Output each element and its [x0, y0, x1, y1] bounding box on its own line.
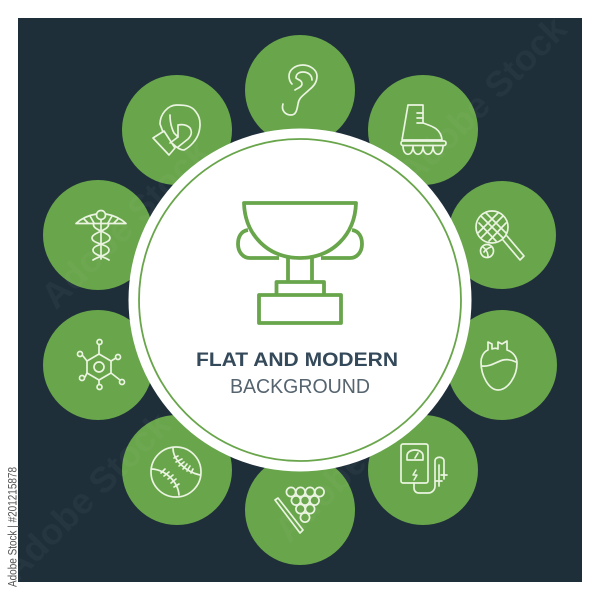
watermark: Adobe Stock [390, 7, 575, 193]
watermark: Adobe Stock [266, 364, 451, 550]
icon: electric multimeter [401, 444, 447, 493]
central green ring [139, 139, 461, 461]
icon: inline skate [401, 105, 446, 154]
icon: tennis racket and ball [476, 211, 524, 260]
icon: anatomical heart [481, 341, 517, 390]
watermark: Adobe Stock [33, 131, 218, 316]
central white circle [128, 128, 472, 472]
icon: molecule [78, 340, 124, 390]
icon: ear [282, 65, 317, 115]
green circles [43, 35, 557, 565]
white line icons [76, 65, 524, 533]
icon: trophy [238, 203, 362, 323]
icon: baseball [151, 447, 201, 497]
icon: caduceus [76, 210, 126, 260]
stock image id label: Adobe Stock | #201215878 [8, 467, 20, 587]
icon: billiard balls and cue [275, 487, 324, 533]
subheading: BACKGROUND [230, 376, 370, 398]
heading: FLAT AND MODERN [196, 350, 398, 371]
icon: boxing gloves [153, 105, 200, 155]
